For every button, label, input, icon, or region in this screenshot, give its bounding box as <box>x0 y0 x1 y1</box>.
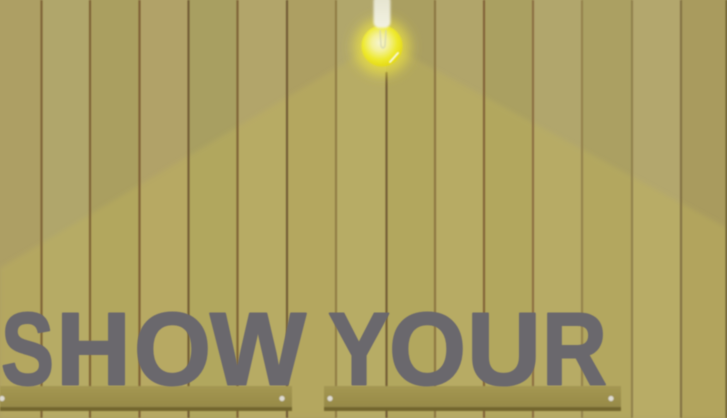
shelf nail <box>0 396 5 401</box>
headline word: SHOW: O <box>134 292 211 406</box>
bulb globe <box>362 26 402 66</box>
headline word: YOUR: Y <box>328 292 390 406</box>
bulb cord <box>374 0 390 28</box>
headline word: SHOW: W <box>210 292 307 406</box>
headline word: YOUR: U <box>467 292 541 406</box>
bulb filament <box>380 30 386 48</box>
headline word: SHOW: S <box>1 292 54 406</box>
headline word: YOUR: O <box>389 292 466 406</box>
shelf nail <box>327 396 333 401</box>
bulb glow <box>354 19 410 75</box>
left shelf <box>0 386 292 411</box>
bulb highlight <box>390 53 398 62</box>
headline word: YOUR: R <box>542 292 607 406</box>
shelf nail <box>279 396 285 401</box>
light bulb <box>354 0 410 75</box>
headline word: SHOW: H <box>56 292 131 406</box>
right shelf <box>324 386 621 411</box>
shelf nail <box>608 396 614 401</box>
